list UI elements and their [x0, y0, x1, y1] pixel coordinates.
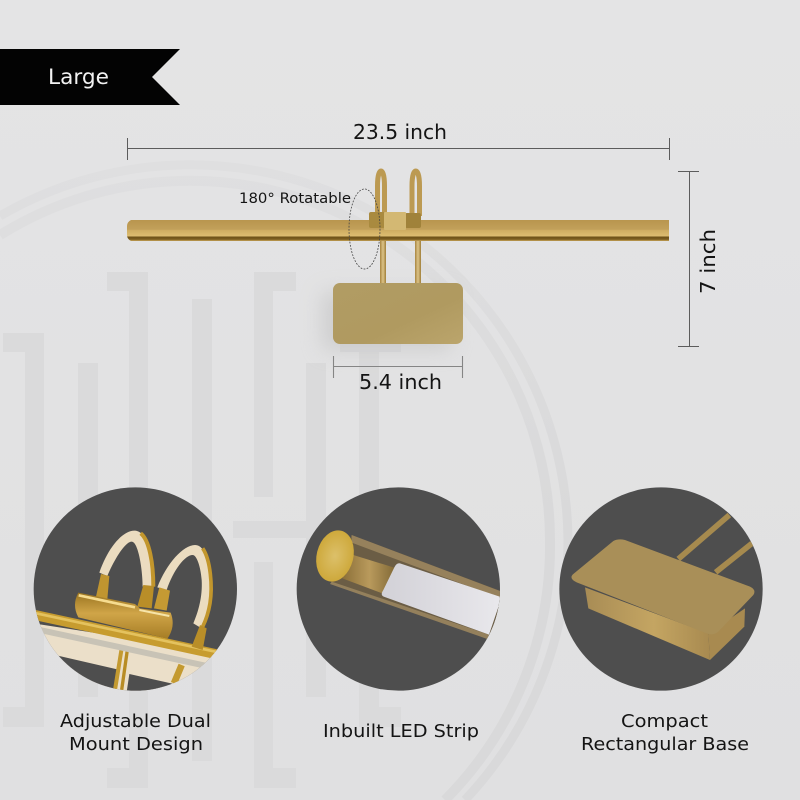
watermark logo [0, 165, 568, 800]
height dimension: 7 inch: 7 inch [696, 229, 720, 294]
caption: rectangular base: Compact [621, 711, 708, 732]
caption: adjustable dual mount: Adjustable Dual [60, 711, 211, 732]
caption: adjustable dual mount [60, 711, 211, 755]
swivel clip [369, 212, 421, 230]
feature: rectangular base [559, 487, 763, 691]
mounting arms [378, 171, 421, 284]
caption: inbuilt LED strip: Inbuilt LED Strip [323, 721, 479, 742]
feature: adjustable dual mount [33, 487, 237, 697]
caption: adjustable dual mount: Mount Design [69, 734, 203, 755]
rotation ellipse [349, 189, 380, 269]
light bar [127, 220, 669, 241]
width dimension: 23.5 inch [128, 120, 670, 160]
base width dimension: 5.4 inch: 5.4 inch [359, 370, 442, 394]
base width dimension: 5.4 inch [334, 356, 462, 394]
lamp shadow [322, 292, 452, 350]
ribbon: size tag: Large [48, 65, 109, 89]
rotation label: 180° Rotatable [239, 191, 351, 207]
base plate [333, 283, 463, 344]
feature: inbuilt LED strip [297, 487, 505, 691]
caption: rectangular base [581, 711, 749, 755]
ribbon: size tag [0, 49, 180, 105]
width dimension: 23.5 inch: 23.5 inch [353, 120, 447, 144]
caption: rectangular base: Rectangular Base [581, 734, 749, 755]
lamp product image [127, 171, 669, 350]
height dimension: 7 inch [678, 171, 720, 346]
